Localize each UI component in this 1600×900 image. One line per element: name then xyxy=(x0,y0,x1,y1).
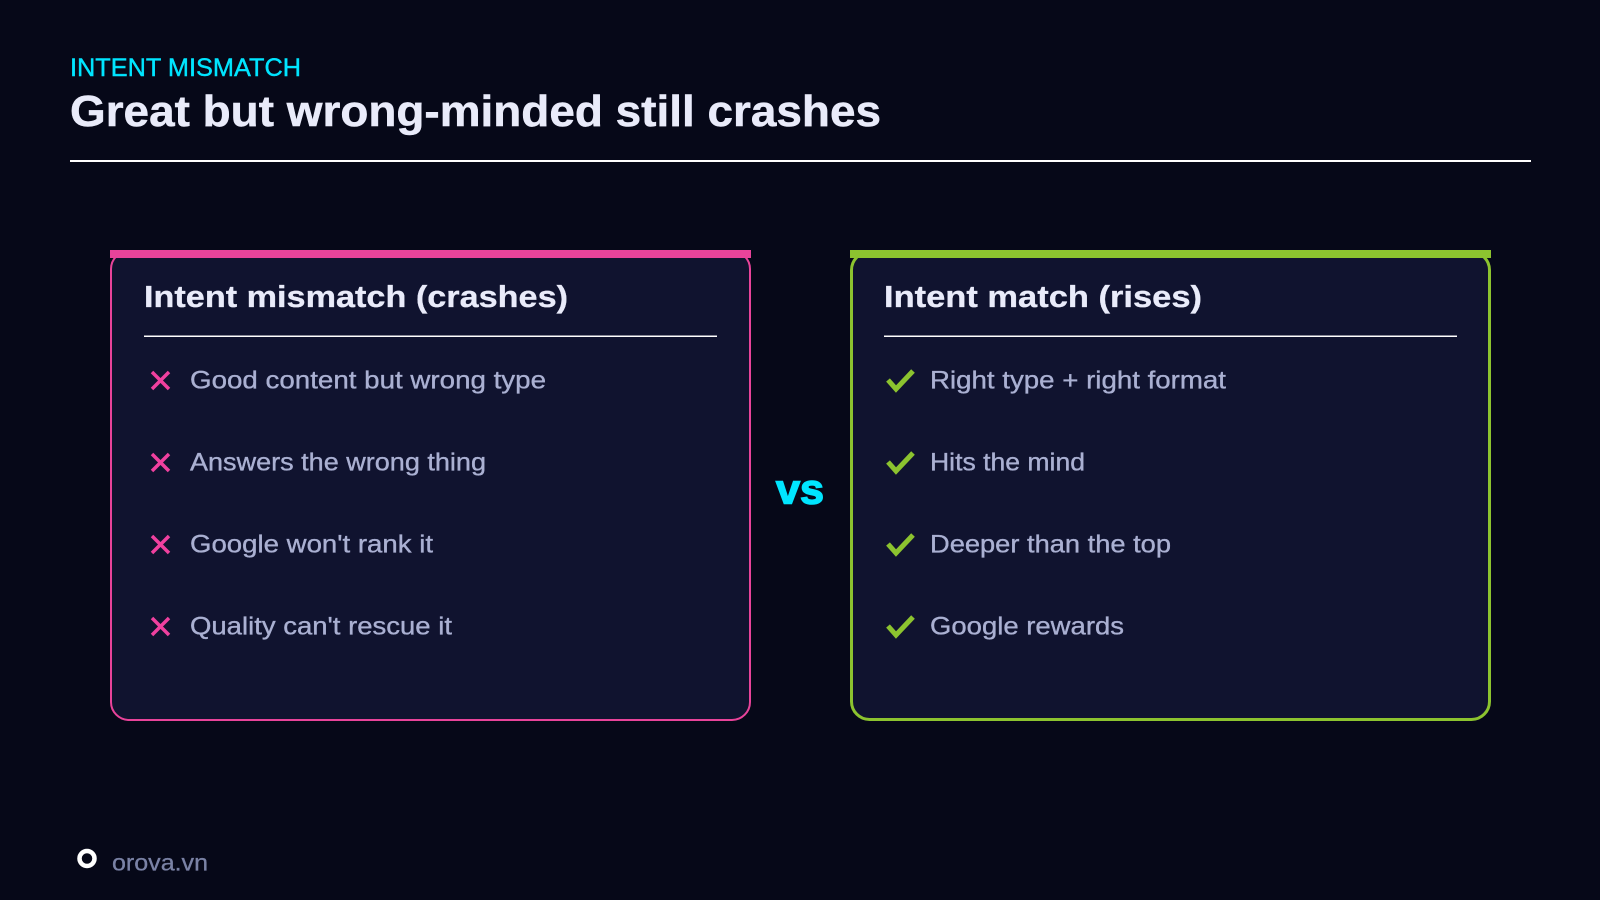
list item: right type + right format: Right type + right format xyxy=(930,366,1226,394)
footer brand xyxy=(80,850,208,876)
panel: intent match xyxy=(850,250,1491,720)
list item: deeper than the top: Deeper than the top xyxy=(930,530,1171,558)
panel: intent mismatch xyxy=(110,250,751,720)
title: Great but wrong-minded still crashes xyxy=(70,87,881,136)
footer text: orova.vn xyxy=(112,850,208,876)
eyebrow label: INTENT MISMATCH xyxy=(70,54,301,82)
list item: google won't rank it: Google won't rank it xyxy=(190,530,433,558)
list item: hits the mind: Hits the mind xyxy=(930,448,1085,476)
list item: quality can't rescue it: Quality can't rescue it xyxy=(190,612,452,640)
panel heading: rises: Intent match (rises) xyxy=(884,279,1202,314)
list item: good content but wrong type: Good content but wrong type xyxy=(190,366,546,394)
list item: google rewards: Google rewards xyxy=(930,612,1124,640)
icon: logo ring xyxy=(80,851,94,866)
list item: answers the wrong thing: Answers the wrong thing xyxy=(190,448,486,476)
panel heading: crashes: Intent mismatch (crashes) xyxy=(144,279,568,314)
vs label: vs xyxy=(776,466,824,512)
